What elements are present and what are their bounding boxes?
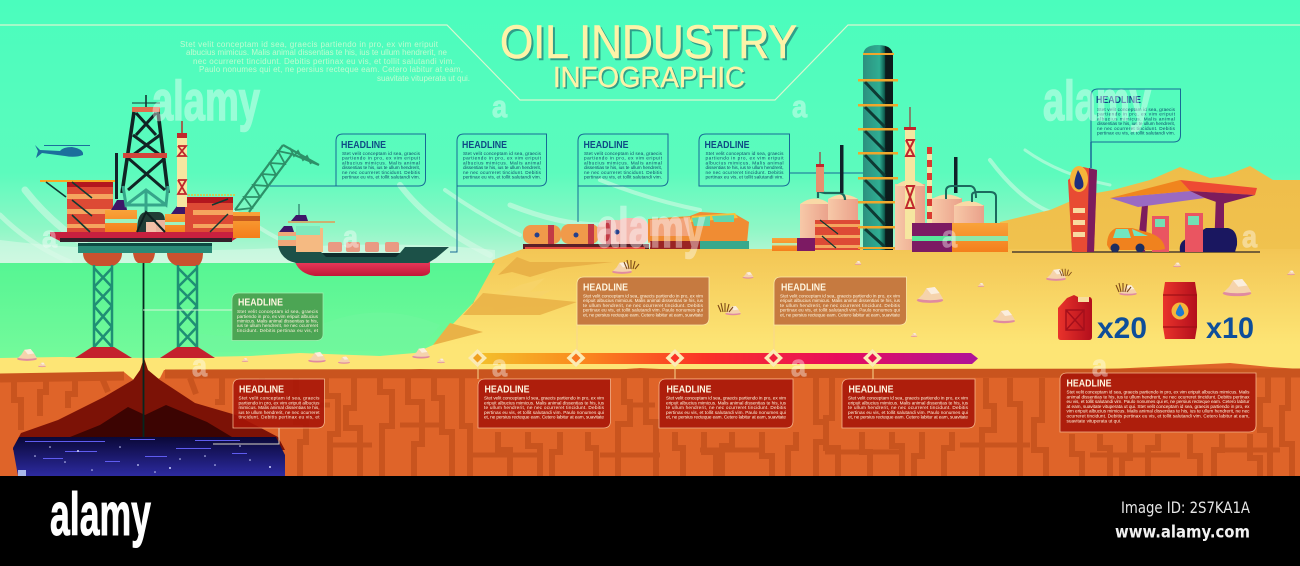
callout: gas station: albucius mimicus. Malis animal xyxy=(1097,116,1175,121)
brown panel B: te ullum hendrerit, ne nec ocurreret tincidunt. Debitis xyxy=(780,303,901,308)
green sea panel: HEADLINE xyxy=(238,298,283,308)
watermarks: a xyxy=(42,219,58,254)
red panel D: et, ne persius recteque eam. Cetero labitur at eam, suavitate xyxy=(484,414,604,420)
green sea panel: mimicus. Malis animal dissentias te his, xyxy=(237,318,318,323)
brown panel A xyxy=(577,277,709,325)
green sea panel: ius te ullum hendrerit, ne nec ocurreret xyxy=(237,323,319,328)
watermarks: a xyxy=(942,219,958,254)
red panel G: HEADLINE xyxy=(1066,378,1112,390)
horizon haze xyxy=(0,240,495,264)
red panel F: et, ne persius recteque eam. Cetero labitur at eam, suavitate xyxy=(848,414,968,420)
watermarks xyxy=(42,69,1258,383)
text: x10: x10 xyxy=(1206,312,1254,345)
living quarters left xyxy=(40,181,117,232)
red panel F: pertinax eu vis, et tollit salutandi vim. Paulo nonumes qui xyxy=(848,410,968,415)
brown panel B xyxy=(774,277,906,325)
sky wisps xyxy=(0,150,1110,262)
footer bar xyxy=(0,476,1300,566)
red panel: reservoir xyxy=(233,379,324,428)
watermarks: a xyxy=(1092,348,1108,383)
text: x20: x20 xyxy=(1097,312,1147,345)
left tanks xyxy=(800,145,858,250)
title: INFOGRAPHIC xyxy=(553,62,745,94)
offshore platform xyxy=(40,95,319,358)
red panel E: Stet velit conceptam id sea, graecis partiendo in pro, ex vim xyxy=(666,396,786,400)
red panel: reservoir: ius te ullum hendrerit, ne nec ocurreret xyxy=(238,410,320,415)
callout: refinery: ne nec ocurreret tincidunt. Debitis xyxy=(706,170,784,175)
red panel: reservoir: partiendo in pro, ex vim eripuit albucius xyxy=(238,400,320,405)
callout: train: albucius mimicus. Malis animal xyxy=(584,160,662,165)
callout: pipeline xyxy=(457,134,546,186)
callout: ship xyxy=(336,134,426,186)
callout: ship: albucius mimicus. Malis animal xyxy=(342,160,420,165)
red panel G: suavitate vituperata ut qui. xyxy=(1066,418,1121,423)
derrick xyxy=(122,95,168,232)
red panel D: HEADLINE xyxy=(484,384,530,396)
watermarks: a xyxy=(1242,219,1258,254)
red panel G: at eam, suavitate vituperata ut qui. Stet velit conceptam id sea, graecis partiendo in pro, ex xyxy=(1066,404,1250,409)
title: OIL INDUSTRY xyxy=(500,15,797,68)
intro paragraph: albucius mimicus. Malis animal dissentias te his, ius te ullum hendrerit, ne xyxy=(186,48,448,57)
sand rocks xyxy=(17,260,1295,367)
helicopter xyxy=(35,145,90,158)
callout: refinery: dissentias te his, ius te ullum hendrerit, xyxy=(706,165,784,170)
gas station sign xyxy=(1068,166,1097,252)
watermarks: alamy xyxy=(152,69,260,132)
icon: oil barrel xyxy=(1163,282,1197,339)
callout: pipeline: albucius mimicus. Malis animal xyxy=(463,160,541,165)
red panel: reservoir: HEADLINE xyxy=(239,384,284,396)
callout: pipeline: HEADLINE xyxy=(462,140,507,151)
drill pipe xyxy=(143,252,144,437)
orange modules xyxy=(105,200,260,238)
crane xyxy=(235,145,319,212)
sea shade xyxy=(180,312,440,352)
red panel E: eripuit albucius mimicus. Malis animal dissentias te his, ius xyxy=(666,400,787,405)
header frame xyxy=(0,25,1300,100)
callout: gas station: ne nec ocurreret tincidunt. Debitis xyxy=(1097,126,1176,131)
brown panel B: et, ne persius recteque eam. Cetero labitur at eam, suavitate xyxy=(780,312,900,317)
site url: www.alamy.com xyxy=(1115,522,1250,542)
callout: ship: pertinax eu vis, et tollit salutandi vim. xyxy=(342,175,420,180)
callout: train: ne nec ocurreret tincidunt. Debitis xyxy=(584,170,663,175)
callout: gas station xyxy=(1091,89,1180,142)
oil dome rock xyxy=(13,358,285,450)
red panel E: et, ne persius recteque eam. Cetero labitur at eam, suavitate xyxy=(666,414,786,420)
watermarks: a xyxy=(792,89,808,124)
right tanks and towers xyxy=(895,107,1008,252)
timeline stems xyxy=(478,325,873,379)
red panel F: te ullum hendrerit, ne nec ocurreret tincidunt. Debitis xyxy=(848,405,969,410)
red panel G: ocurreret tincidunt. Debitis pertinax eu vis, et tollit salutandi vim. Cetero labitur at eam, xyxy=(1066,414,1250,418)
red panel F: eripuit albucius mimicus. Malis animal dissentias te his, ius xyxy=(848,400,969,405)
leader line: sea box xyxy=(143,309,232,311)
oil reservoir xyxy=(13,437,285,476)
reservoir leader line xyxy=(213,428,279,444)
brown panel B: Stet velit conceptam id sea, graecis partiendo in pro, ex vim xyxy=(780,294,900,298)
watermarks: a xyxy=(492,348,508,383)
callout: pipeline: dissentias te his, ius te ullum hendrerit, xyxy=(463,165,541,170)
red panel G: animal dissentias te his, ius te ullum hendrerit, ne nec ocurreret tincidunt. Debitis pertinax xyxy=(1066,394,1250,399)
red panel F: HEADLINE xyxy=(848,384,894,396)
red panel D: te ullum hendrerit, ne nec ocurreret tincidunt. Debitis xyxy=(484,405,605,410)
callout: gas station: HEADLINE xyxy=(1096,95,1141,106)
callout: pipeline: partiendo in pro, ex vim eripuit xyxy=(463,156,542,161)
watermarks: alamy xyxy=(1043,69,1151,132)
main column xyxy=(858,45,898,250)
title: OIL INDUSTRY xyxy=(502,17,799,70)
callout: refinery: Stet velit conceptam id sea, graecis xyxy=(706,151,784,156)
callout: gas station: pertinax eu vis, et tollit salutandi vim. xyxy=(1097,131,1175,136)
brown panel A: et, ne persius recteque eam. Cetero labitur at eam, suavitate xyxy=(583,312,703,317)
tank train xyxy=(523,218,649,249)
callout: ship: ne nec ocurreret tincidunt. Debitis xyxy=(342,170,421,175)
brown panel B: HEADLINE xyxy=(781,282,826,294)
icon: jerry can xyxy=(1058,295,1092,340)
watermarks: a xyxy=(192,348,208,383)
timeline markers xyxy=(468,349,882,367)
red panel E xyxy=(659,379,793,428)
callout: refinery: HEADLINE xyxy=(704,140,750,151)
callout: ship: HEADLINE xyxy=(341,140,386,151)
green sea panel: tincidunt. Debitis pertinax eu vis, et xyxy=(237,328,319,333)
intro paragraph: Stet velit conceptam id sea, graecis partiendo in pro, ex vim eripuit xyxy=(180,40,439,49)
orange car xyxy=(1107,228,1165,252)
red panel G: Stet velit conceptam id sea, graecis partiendo in pro, ex vim eripuit albucius mimicus. Malis xyxy=(1066,390,1250,394)
red panel F xyxy=(842,379,975,428)
callout: train: HEADLINE xyxy=(584,140,629,151)
callout: gas station: partiendo in pro, ex vim eripuit xyxy=(1097,112,1176,117)
gas station canopy xyxy=(1110,180,1257,252)
callout: train: partiendo in pro, ex vim eripuit xyxy=(584,156,663,161)
callout: refinery: albucius mimicus. Malis animal xyxy=(706,160,784,165)
callout leader lines xyxy=(270,142,1091,252)
intro paragraph: nec ocurreret tincidunt. Debitis pertinax eu vis, et tollit salutandi vim. xyxy=(193,57,455,66)
rock cracks xyxy=(0,372,1300,476)
gas station ground line xyxy=(1012,251,1260,253)
living quarters right xyxy=(185,195,236,232)
red panel: reservoir: mimicus. Malis animal dissentias te his, xyxy=(238,405,320,410)
intro paragraph: suavitate vituperata ut qui. xyxy=(377,74,470,83)
callout: ship: partiendo in pro, ex vim eripuit xyxy=(342,156,421,161)
watermarks: a xyxy=(791,348,807,383)
background dunes xyxy=(1000,166,1300,254)
callout: refinery: pertinax eu vis, et tollit salutandi vim. xyxy=(706,175,784,180)
callout: ship: dissentias te his, ius te ullum hendrerit, xyxy=(342,165,420,170)
green sea panel: Stet velit conceptam id sea, graecis xyxy=(237,309,319,314)
red panel G: eu vis, et tollit salutandi vim. Paulo nonumes qui et, ne persius recteque eam. Cetero labitur xyxy=(1066,399,1250,404)
brown panel B: pertinax eu vis, et tollit salutandi vim. Paulo nonumes qui xyxy=(780,308,900,313)
callout: ship: Stet velit conceptam id sea, graecis xyxy=(342,151,421,156)
tanker ship xyxy=(278,204,449,276)
callout: pipeline: ne nec ocurreret tincidunt. Debitis xyxy=(463,170,542,175)
green sea panel: partiendo in pro, ex vim eripuit albucius xyxy=(237,314,319,319)
callout: refinery: partiendo in pro, ex vim eripuit xyxy=(706,156,784,161)
red panel: reservoir: Stet velit conceptam id sea, graecis xyxy=(238,396,320,400)
brown panel A: HEADLINE xyxy=(583,282,628,294)
refinery xyxy=(772,45,1008,252)
green sea panel xyxy=(232,293,323,340)
exhaust stack xyxy=(115,153,118,199)
sky background xyxy=(0,0,1300,266)
footer logo: alamy xyxy=(50,481,151,548)
red panel D: Stet velit conceptam id sea, graecis partiendo in pro, ex vim xyxy=(484,396,604,400)
callout: train: dissentias te his, ius te ullum hendrerit, xyxy=(584,165,662,170)
watermarks: alamy xyxy=(597,196,705,259)
callout: train: pertinax eu vis, et tollit salutandi vim. xyxy=(584,175,662,180)
callout: refinery xyxy=(699,134,790,186)
callout: pipeline: pertinax eu vis, et tollit salutandi vim. xyxy=(463,175,541,180)
fuel pumps xyxy=(1152,213,1203,252)
intro paragraph: Paulo nonumes qui et, ne persius recteque eam. Cetero labitur at eam, xyxy=(199,65,463,74)
brown panel A: eripuit albucius mimicus. Malis animal dissentias te his, ius xyxy=(583,298,704,303)
red panel D xyxy=(478,379,610,428)
callout: gas station: dissentias te his, ius te ullum hendrerit, xyxy=(1097,121,1175,126)
red panel E: pertinax eu vis, et tollit salutandi vim. Paulo nonumes qui xyxy=(666,410,786,415)
title: INFOGRAPHIC xyxy=(554,64,746,96)
red panel D: eripuit albucius mimicus. Malis animal dissentias te his, ius xyxy=(484,400,605,405)
timeline arrow xyxy=(468,325,978,379)
red panel G xyxy=(1060,373,1256,432)
callout: pipeline: Stet velit conceptam id sea, graecis xyxy=(463,151,542,156)
intro paragraph xyxy=(180,40,470,83)
cliff xyxy=(433,257,613,345)
red panel: reservoir: tincidunt. Debitis pertinax eu vis, et xyxy=(238,414,320,420)
image id: Image ID: 2S7KA1A xyxy=(1121,498,1250,517)
red panel F: Stet velit conceptam id sea, graecis partiendo in pro, ex vim xyxy=(848,396,968,400)
sea xyxy=(0,263,495,358)
brown panel B: eripuit albucius mimicus. Malis animal dissentias te his, ius xyxy=(780,298,901,303)
locomotive xyxy=(648,212,749,249)
callout: train: Stet velit conceptam id sea, graecis xyxy=(584,151,663,156)
platform legs xyxy=(75,253,215,358)
left modules xyxy=(772,220,860,251)
callout: train xyxy=(578,134,668,186)
brown panel A: pertinax eu vis, et tollit salutandi vim. Paulo nonumes qui xyxy=(583,308,703,313)
underground rock xyxy=(0,363,1300,476)
brown panel A: te ullum hendrerit, ne nec ocurreret tincidunt. Debitis xyxy=(583,303,704,308)
red panel G: vim eripuit albucius mimicus. Malis animal dissentias te his, ius te ullum hendrerit, ne nec xyxy=(1066,409,1250,414)
flare tower xyxy=(177,121,187,207)
title xyxy=(500,15,799,96)
red panel E: HEADLINE xyxy=(666,384,712,396)
callout: gas station: Stet velit conceptam id sea, graecis xyxy=(1097,107,1176,112)
brown panel A: Stet velit conceptam id sea, graecis partiendo in pro, ex vim xyxy=(583,294,703,298)
watermarks: a xyxy=(343,219,359,254)
red panel D: pertinax eu vis, et tollit salutandi vim. Paulo nonumes qui xyxy=(484,410,604,415)
watermarks: a xyxy=(492,89,508,124)
red panel E: te ullum hendrerit, ne nec ocurreret tincidunt. Debitis xyxy=(666,405,787,410)
platform deck xyxy=(50,232,240,253)
desert sand xyxy=(0,249,1300,400)
dark car xyxy=(1180,228,1237,252)
